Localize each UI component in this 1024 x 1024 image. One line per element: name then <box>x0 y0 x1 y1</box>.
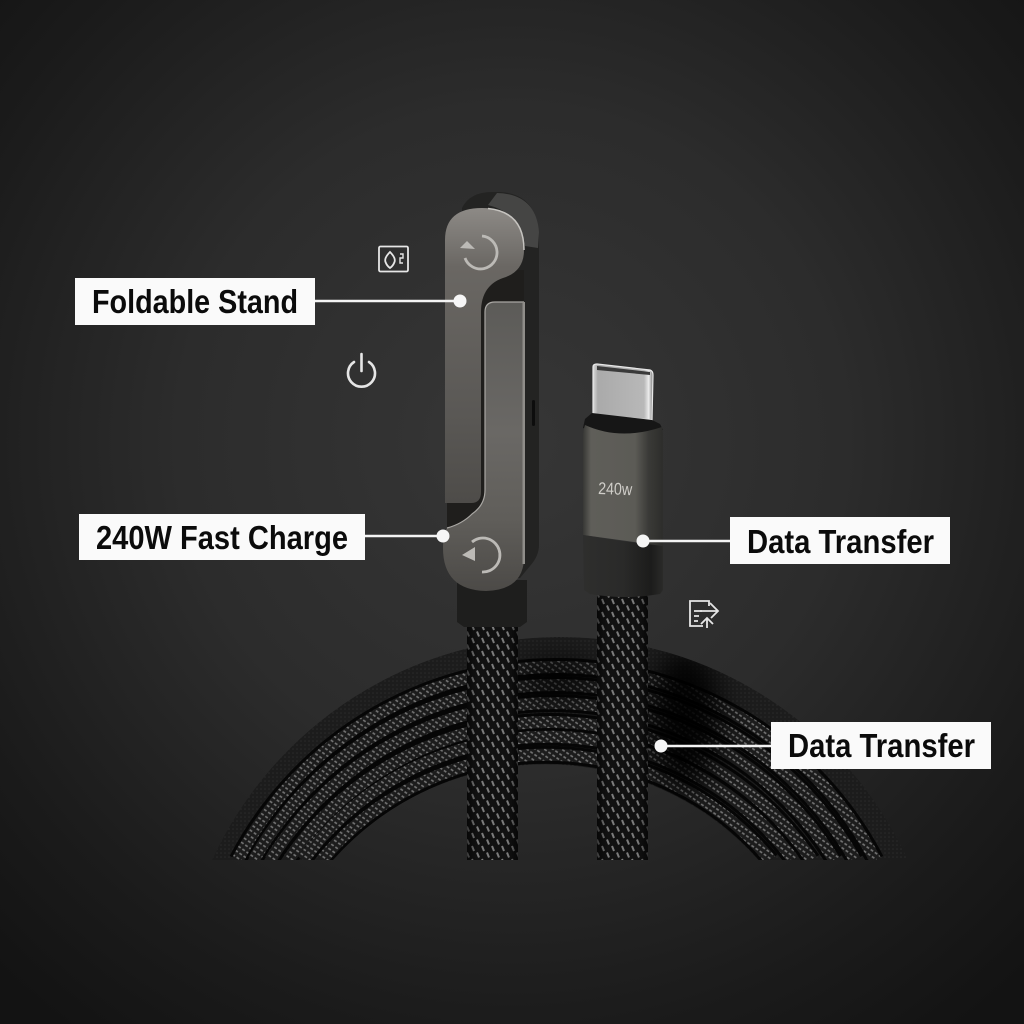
callout: Data Transfer (connector) <box>636 517 950 564</box>
upper arm with rotation head <box>445 208 524 503</box>
foldable stand connector <box>443 192 539 627</box>
callout: 240W Fast Charge <box>79 514 450 560</box>
callout: Data Transfer (connector): Data Transfer <box>747 523 934 560</box>
neck <box>457 580 527 627</box>
240W engraving: 240w <box>598 479 633 499</box>
USB-C connector <box>583 364 663 597</box>
right cable: braided section <box>597 592 648 860</box>
icon: lower rotate arrow <box>462 538 500 572</box>
icon: power <box>348 354 375 387</box>
icon: chip badge <box>379 246 408 272</box>
metal plug <box>593 364 653 420</box>
coiled braided cable <box>212 637 908 860</box>
status slot <box>532 400 535 426</box>
rear dark plate <box>462 192 539 578</box>
callout: Data Transfer (cable) <box>654 722 991 769</box>
left cable: braided section <box>467 622 518 860</box>
dark collar <box>583 413 663 438</box>
sliding plate and lower rotation head <box>443 302 524 591</box>
aluminium housing <box>583 425 663 546</box>
housing lower sleeve <box>583 535 663 597</box>
icon: data transfer <box>690 601 718 628</box>
callout: 240W Fast Charge: 240W Fast Charge <box>96 519 348 556</box>
callout: Foldable Stand <box>75 278 466 325</box>
dark inner gap <box>447 270 524 540</box>
icon: upper rotate arrow <box>460 236 497 269</box>
callout: Foldable Stand: Foldable Stand <box>92 283 298 320</box>
callout: Data Transfer (cable): Data Transfer <box>788 727 975 764</box>
